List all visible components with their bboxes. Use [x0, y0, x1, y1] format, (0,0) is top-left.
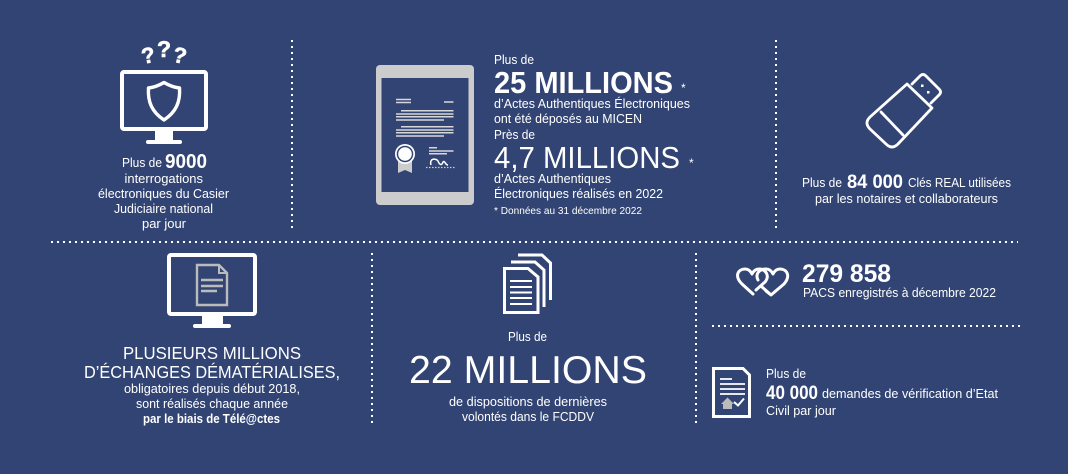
- panel: dernières volontés: [409, 255, 647, 424]
- text: plusieurs millions: [84, 343, 340, 426]
- icon: USB key: [867, 74, 940, 147]
- text: 25 millions: *: [681, 81, 686, 95]
- icon: tablet with certificate: [376, 65, 474, 205]
- text: 84 000 clés REAL: Plus de: [802, 175, 842, 190]
- text: plusieurs millions: par le biais de Télé@ctes: [143, 411, 280, 426]
- text: 9000 interrogations: [98, 151, 230, 231]
- text: 84 000 clés REAL: [802, 172, 1011, 206]
- icon: question marks: ?: [157, 36, 171, 62]
- icon: monitor with shield: [122, 72, 206, 144]
- icon: question marks: [139, 36, 189, 69]
- text: 84 000 clés REAL: par les notaires et collaborateurs: [815, 191, 998, 206]
- panel: PACS: [738, 260, 996, 300]
- text: 25 millions: d’Actes Authentiques Électroniques: [494, 96, 690, 111]
- text: 40 000 demandes: 40 000: [766, 383, 818, 404]
- text: 40 000 demandes: [766, 366, 998, 418]
- text: 279 858 PACS: 279 858: [802, 260, 891, 288]
- text: 4,7 millions: [494, 127, 694, 201]
- text: 84 000 clés REAL: Clés REAL utilisées: [908, 175, 1011, 190]
- icon: stacked documents: [504, 255, 550, 312]
- text: 9000 interrogations: Plus de: [122, 155, 162, 170]
- text: 4,7 millions: Électroniques réalisés en 2022: [494, 186, 663, 201]
- text: 279 858 PACS: PACS enregistrés à décembre 2022: [803, 285, 996, 300]
- panel: actes authentiques: [376, 52, 694, 217]
- text: plusieurs millions: obligatoires depuis début 2018,: [124, 381, 300, 396]
- icon: question marks: ?: [139, 42, 157, 69]
- icon: monitor with document: [169, 255, 255, 328]
- text: 22 millions: volontés dans le FCDDV: [462, 409, 594, 424]
- text: plusieurs millions: sont réalisés chaque année: [136, 396, 288, 411]
- panel: casier judiciaire: [98, 36, 230, 231]
- text: 9000 interrogations: interrogations: [124, 171, 203, 186]
- text: 25 millions: ont été déposés au MICEN: [494, 111, 642, 126]
- panel: état civil: [714, 366, 998, 418]
- text: 22 millions: Plus de: [508, 329, 547, 344]
- text: 4,7 millions: 4,7 MILLIONS: [494, 140, 680, 175]
- text: 279 858 PACS: [802, 260, 996, 300]
- text: 22 millions: de dispositions de dernières: [449, 394, 607, 409]
- text: 4,7 millions: d’Actes Authentiques: [494, 171, 611, 186]
- text: 4,7 millions: Près de: [494, 127, 535, 142]
- text: plusieurs millions: PLUSIEURS MILLIONS: [123, 343, 301, 363]
- text: 40 000 demandes: Plus de: [766, 366, 806, 381]
- footnote: * Données au 31 décembre 2022: [494, 205, 642, 217]
- text: 25 millions: [494, 52, 690, 126]
- text: 22 millions: 22 MILLIONS: [409, 349, 647, 392]
- text: 84 000 clés REAL: 84 000: [847, 172, 903, 193]
- icon: document with house and check: [714, 368, 750, 416]
- panel: échanges dématérialisés: [84, 255, 340, 426]
- text: 9000 interrogations: Judiciaire national: [114, 201, 213, 216]
- text: 25 millions: Plus de: [494, 52, 534, 67]
- text: 9000 interrogations: électroniques du Casier: [98, 186, 230, 201]
- text: 40 000 demandes: Civil par jour: [766, 403, 837, 418]
- text: 40 000 demandes: demandes de vérification d’Etat: [822, 386, 998, 401]
- icon: linked hearts: [738, 269, 788, 295]
- text: 25 millions: 25 MILLIONS: [494, 65, 673, 100]
- icon: question marks: ?: [171, 42, 189, 69]
- text: 9000 interrogations: par jour: [142, 216, 187, 231]
- text: 22 millions: [409, 329, 647, 424]
- text: 4,7 millions: *: [689, 156, 694, 170]
- panel: clés REAL: [802, 74, 1011, 206]
- text: 9000 interrogations: 9000: [165, 151, 207, 173]
- text: plusieurs millions: D’ÉCHANGES DÉMATÉRIALISES,: [84, 362, 340, 382]
